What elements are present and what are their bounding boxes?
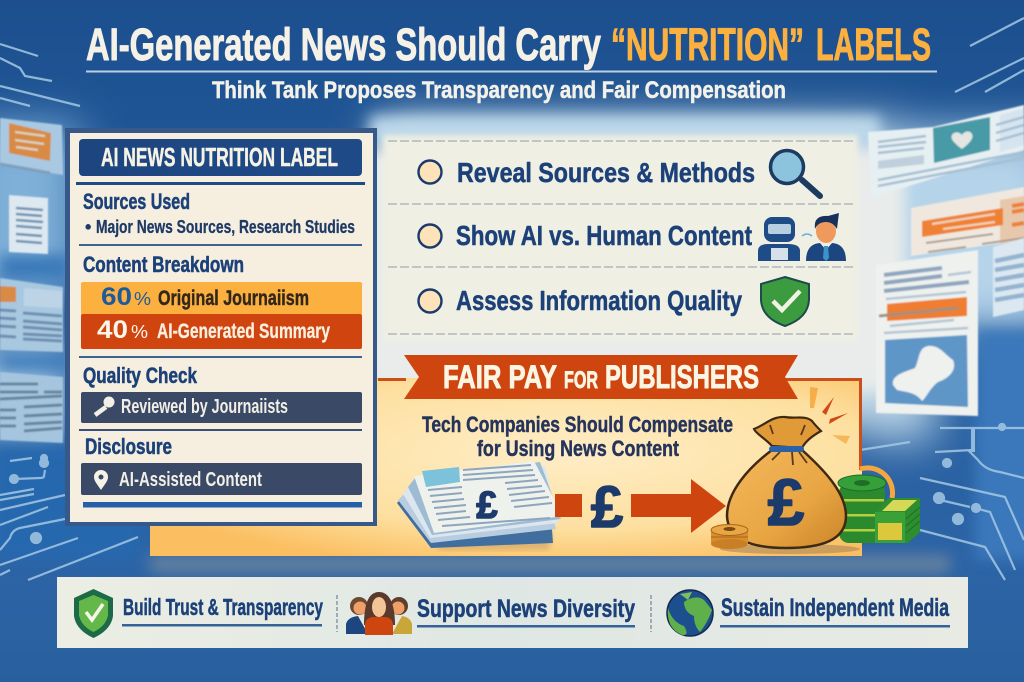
section: disclosure bbox=[81, 434, 362, 495]
section: quality check: Quality Check bbox=[83, 363, 198, 388]
banner: FAIR PAY bbox=[443, 359, 557, 395]
section: quality check: Reviewed by Journaiists bbox=[121, 396, 288, 418]
section: content breakdown bbox=[81, 252, 362, 349]
title: “NUTRITION” bbox=[611, 19, 804, 70]
section: quality check bbox=[81, 363, 362, 423]
benefit: build trust and transparency: Build Trust & Transparency bbox=[123, 594, 323, 620]
text: compensation message bbox=[422, 412, 733, 461]
benefit: support news diversity bbox=[346, 592, 635, 635]
icon: money bag: £ bbox=[768, 465, 805, 539]
icon: newspapers bbox=[397, 461, 563, 550]
icon: robot and human bbox=[758, 213, 846, 261]
panel: ai news nutrition label bbox=[65, 128, 377, 526]
text: compensation message: for Using News Content bbox=[477, 436, 680, 461]
arrow: money flow to publishers: £ bbox=[591, 475, 623, 540]
label heading bbox=[79, 139, 362, 176]
banner: FOR bbox=[564, 367, 598, 394]
section: disclosure: Disclosure bbox=[85, 434, 172, 459]
icon: magnifying glass bbox=[770, 150, 820, 196]
banner bbox=[404, 355, 798, 399]
section: disclosure: AI-Assisted Content bbox=[119, 469, 262, 491]
benefit: sustain independent media bbox=[667, 590, 950, 636]
panel: key requirements checklist bbox=[383, 135, 858, 341]
bar: 60 percent original journalism: 60 bbox=[101, 283, 132, 311]
item: show ai vs human content: Show AI vs. Human Content bbox=[456, 220, 752, 251]
bar: 40 percent ai-generated summary bbox=[81, 314, 362, 349]
label heading: AI NEWS NUTRITION LABEL bbox=[101, 142, 338, 172]
benefit: support news diversity: Support News Diversity bbox=[417, 595, 635, 623]
icon: newspapers: £ bbox=[476, 485, 498, 527]
icon: trust shield bbox=[74, 589, 113, 638]
icon: money bag bbox=[711, 387, 920, 554]
decorative newspaper pages: left side bbox=[0, 118, 63, 443]
item: assess information quality: Assess Information Quality bbox=[456, 285, 742, 316]
banner: PUBLISHERS bbox=[605, 359, 759, 395]
section: sources used: Major News Sources, Research Studies bbox=[96, 216, 355, 237]
section: content breakdown: Content Breakdown bbox=[83, 252, 244, 277]
decorative newspaper pages: right side bbox=[868, 105, 1024, 416]
bar: 40 percent ai-generated summary: % bbox=[131, 322, 148, 342]
item: reveal sources and methods: Reveal Sources & Methods bbox=[457, 157, 755, 188]
section: sources used: Sources Used bbox=[83, 189, 190, 214]
icon: group of people bbox=[346, 592, 412, 635]
icon: location pin bbox=[94, 470, 108, 490]
bar: 60 percent original journalism: Original Journaiism bbox=[158, 287, 309, 310]
panel: benefits strip bbox=[57, 577, 968, 648]
icon: quality shield bbox=[761, 277, 809, 326]
title: AI-Generated News Should Carry bbox=[86, 19, 601, 70]
icon: globe bbox=[667, 590, 713, 636]
bar: 40 percent ai-generated summary: 40 bbox=[97, 316, 128, 344]
icon: microphone bbox=[95, 396, 114, 415]
text: compensation message: Tech Companies Should Compensate bbox=[422, 412, 733, 437]
section: sources used bbox=[83, 189, 355, 237]
cash stacks bbox=[838, 468, 920, 543]
title: LABELS bbox=[816, 19, 931, 70]
arrow: money flow to publishers bbox=[555, 475, 726, 540]
bar: 60 percent original journalism: % bbox=[134, 289, 151, 309]
bar: 40 percent ai-generated summary: AI-Generated Summary bbox=[157, 320, 330, 343]
coins bbox=[711, 524, 748, 549]
benefit: build trust and transparency bbox=[74, 589, 323, 638]
bar: 60 percent original journalism bbox=[81, 282, 362, 315]
subtitle: Think Tank Proposes Transparency and Fair Compensation bbox=[212, 77, 786, 104]
section: sources used: • bbox=[85, 217, 91, 237]
panel: fair pay for publishers bbox=[150, 355, 920, 556]
